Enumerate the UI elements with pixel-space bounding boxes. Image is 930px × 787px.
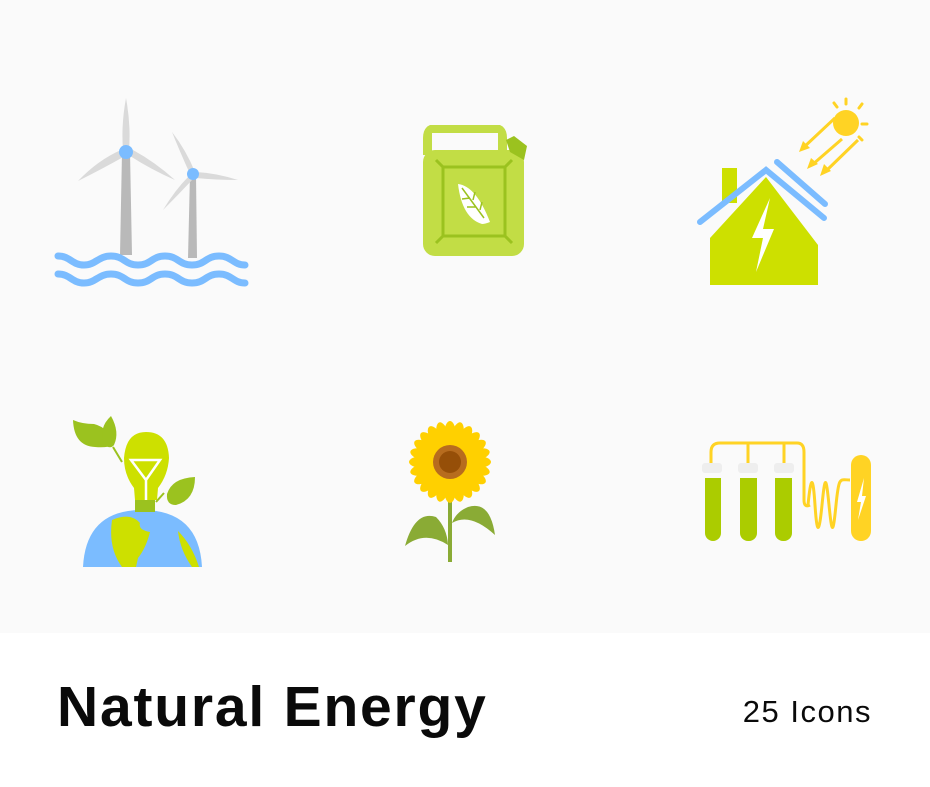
title: Natural Energy [57,675,488,739]
icon count: 25 Icons [743,694,872,729]
icon: test tube battery [702,443,871,541]
icon: solar house [700,99,867,285]
icon: eco bulb on globe [73,416,202,567]
icon: sunflower [405,421,495,562]
icon: offshore wind turbines [58,98,245,283]
icon: biofuel jerry can [423,125,527,256]
